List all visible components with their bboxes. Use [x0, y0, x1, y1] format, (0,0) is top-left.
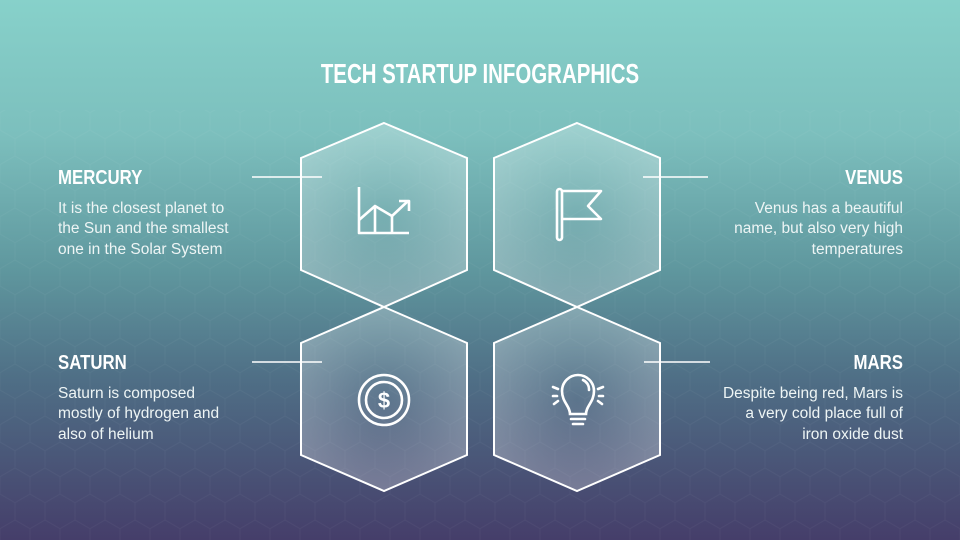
connector: mars: [644, 361, 710, 363]
text: saturn: [58, 352, 219, 442]
text: mars: MARS: [854, 352, 903, 374]
connector: saturn: [252, 361, 322, 363]
text: mercury: [58, 167, 229, 258]
icon: dollar coin: $: [378, 388, 390, 413]
hexagon: mercury: [301, 123, 467, 307]
text: saturn: SATURN: [58, 352, 127, 374]
icon: light bulb: [553, 375, 603, 424]
text: mercury: It is the closest planet to: [58, 200, 224, 216]
text: saturn: mostly of hydrogen and: [58, 405, 219, 422]
text: mars: iron oxide dust: [802, 426, 903, 442]
icon: dollar coin: [359, 375, 409, 425]
text: mars: Despite being red, Mars is: [723, 384, 903, 402]
text: mars: [723, 352, 903, 442]
text: mercury: the Sun and the smallest: [58, 220, 229, 237]
text: venus: name, but also very high: [734, 220, 903, 237]
title: TECH STARTUP INFOGRAPHICS: [321, 58, 639, 89]
connector: venus: [643, 176, 708, 178]
text: venus: Venus has a beautiful: [755, 200, 903, 216]
text: mercury: one in the Solar System: [58, 240, 223, 258]
text: venus: temperatures: [812, 240, 903, 258]
icon: chart: [359, 187, 409, 233]
hexagon: saturn: [301, 307, 467, 491]
hexagon: venus: [494, 123, 660, 307]
hexagon: mars: [494, 307, 660, 491]
text: saturn: Saturn is composed: [58, 384, 195, 402]
text: venus: [734, 167, 903, 258]
text: mercury: MERCURY: [58, 167, 142, 189]
text: venus: VENUS: [845, 167, 903, 189]
connector: mercury: [252, 176, 322, 178]
icon: flag: [557, 189, 601, 240]
text: mars: a very cold place full of: [745, 405, 903, 422]
text: saturn: also of helium: [58, 426, 154, 442]
